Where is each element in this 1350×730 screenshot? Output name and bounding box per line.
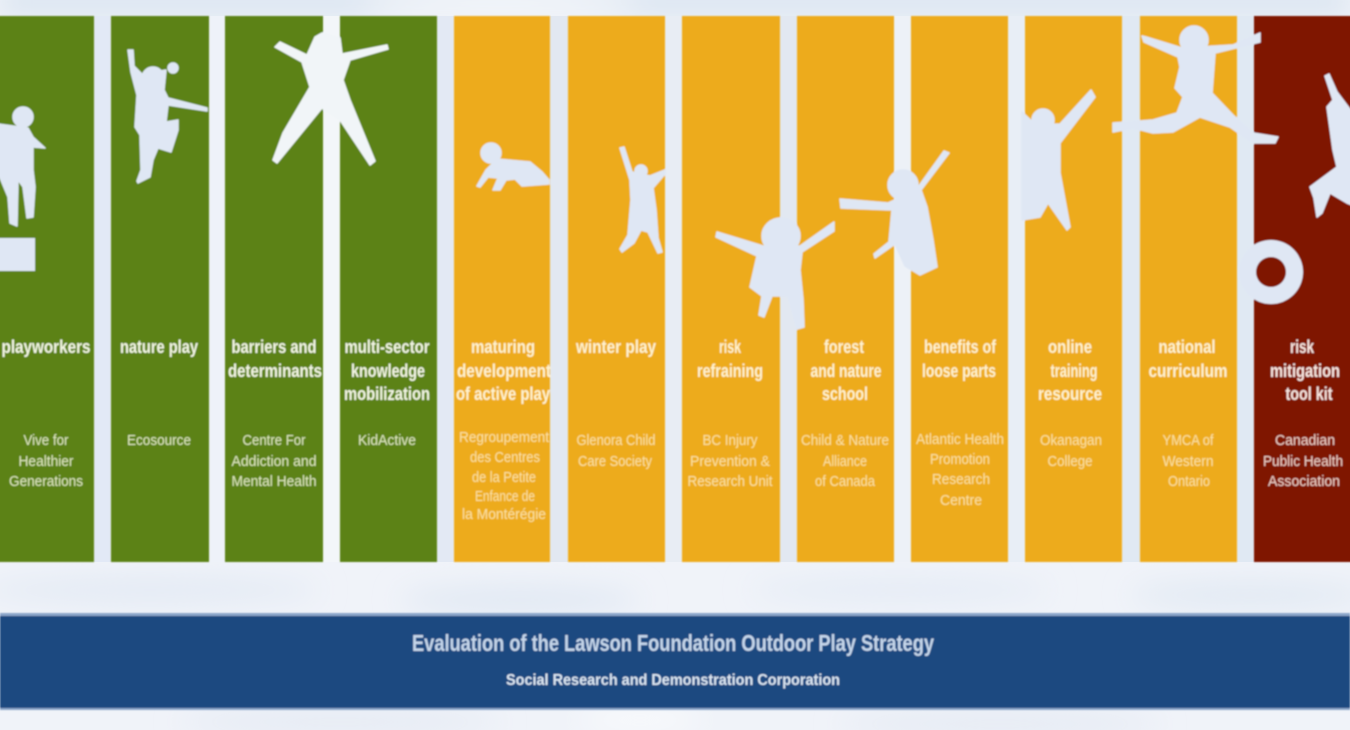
icon: jumping block (0, 238, 35, 271)
panel: winter play: Care Society (578, 454, 653, 470)
panel: benefits of loose parts (911, 16, 1008, 562)
panel: risk refraining: Research Unit (688, 474, 772, 490)
panel: multi-sector knowledge mobilization: knowledge (351, 361, 425, 381)
panel: risk refraining: refraining (697, 361, 763, 381)
panel: risk refraining: risk (719, 337, 742, 357)
panel: benefits of loose parts: benefits of (924, 337, 997, 357)
panel: benefits of loose parts: Centre (940, 493, 982, 509)
panel: forest and nature school: Child & Nature (801, 433, 889, 449)
panel: winter play (568, 16, 665, 562)
panel: maturing development of active play: development (457, 361, 551, 381)
panel: online training resource: College (1048, 454, 1092, 470)
panel: online training resource: training (1050, 361, 1098, 381)
panel: forest and nature school: school (822, 384, 868, 404)
panel: playworkers: Vive for (24, 433, 69, 449)
panel: risk mitigation tool kit: tool kit (1286, 384, 1332, 404)
panel: national curriculum: YMCA of (1162, 433, 1214, 449)
panel: nature play: nature play (120, 337, 198, 357)
panel: risk mitigation tool kit: risk (1290, 337, 1315, 357)
panel: forest and nature school: forest (824, 337, 864, 357)
panel: barriers and determinants (225, 16, 323, 562)
panel: risk refraining: BC Injury (702, 433, 758, 449)
panel: national curriculum (1140, 16, 1237, 562)
panel: maturing development of active play: Enfance de (475, 489, 535, 505)
panel: risk refraining: Prevention & (690, 454, 770, 470)
panel: maturing development of active play: maturing (471, 337, 535, 357)
panel: playworkers: Generations (9, 474, 83, 490)
panel: benefits of loose parts: Atlantic Health (916, 432, 1004, 448)
panel: forest and nature school: Alliance (823, 454, 867, 470)
panel: benefits of loose parts: Research (932, 472, 990, 488)
panel: maturing development of active play: de la Petite (472, 470, 536, 486)
icon: child jumping (0, 107, 45, 226)
panel: online training resource: Okanagan (1040, 433, 1102, 449)
panel: multi-sector knowledge mobilization: KidActive (358, 433, 416, 449)
panel: benefits of loose parts: loose parts (922, 361, 996, 381)
panel: playworkers: playworkers (2, 337, 90, 357)
icon: child climbing, cropped (1310, 74, 1350, 217)
panel: maturing development of active play: des Centres (470, 450, 540, 466)
icon: child jumping arms up (620, 147, 665, 253)
panel: national curriculum: Western (1162, 454, 1214, 470)
panel: multi-sector knowledge mobilization (340, 16, 437, 562)
panel: risk mitigation tool kit: Canadian (1275, 433, 1335, 449)
icon: ring (1239, 240, 1303, 304)
panel: maturing development of active play: la Montérégie (462, 507, 546, 523)
panel: maturing development of active play: Regroupement (459, 430, 549, 446)
panel: national curriculum: Ontario (1168, 474, 1210, 490)
panel: barriers and determinants: Mental Health (232, 474, 316, 490)
report title: Evaluation of the Lawson Foundation Outdoor Play Strategy (412, 630, 934, 656)
panel: online training resource: resource (1038, 384, 1102, 404)
panel: benefits of loose parts: Promotion (930, 452, 990, 468)
icon: star-jumping child (273, 33, 388, 165)
icon: child jumping, arm raised (1022, 90, 1095, 230)
panel: risk mitigation tool kit: Association (1268, 474, 1340, 490)
icon: girl leaping (128, 50, 207, 183)
panel: playworkers (0, 16, 94, 562)
panel: nature play: Ecosource (127, 433, 191, 449)
panel: maturing development of active play (454, 16, 551, 562)
panel: online training resource: online (1048, 337, 1092, 357)
footer band (0, 613, 1350, 710)
report author: Social Research and Demonstration Corporation (506, 672, 840, 689)
panel: maturing development of active play: of active play (456, 384, 550, 404)
panel: barriers and determinants: Centre For (242, 433, 306, 449)
panel: winter play: Glenora Child (576, 433, 656, 449)
panel: playworkers: Healthier (18, 454, 74, 470)
panel: national curriculum: curriculum (1148, 361, 1228, 381)
panel: risk refraining (682, 16, 780, 562)
panel: risk mitigation tool kit (1239, 16, 1350, 562)
icon: splits-jumping child (1113, 26, 1278, 143)
panel: multi-sector knowledge mobilization: mobilization (344, 384, 430, 404)
panel: barriers and determinants: barriers and (232, 337, 316, 357)
panel: national curriculum: national (1158, 337, 1216, 357)
panel: forest and nature school (797, 16, 894, 562)
icon: child with outstretched arms (716, 218, 834, 329)
panel: online training resource (1025, 16, 1122, 562)
panel: multi-sector knowledge mobilization: multi-sector (344, 337, 430, 357)
panel: winter play: winter play (575, 337, 656, 357)
panel: forest and nature school: of Canada (815, 474, 876, 490)
panel: forest and nature school: and nature (810, 361, 882, 381)
panel: nature play (111, 16, 209, 562)
icon: crawling baby (477, 143, 549, 190)
panel: risk mitigation tool kit: Public Health (1263, 454, 1343, 470)
panel: barriers and determinants: Addiction and (232, 454, 316, 470)
icon: child leaping with arm raised (840, 151, 949, 275)
panel: barriers and determinants: determinants (228, 361, 322, 381)
